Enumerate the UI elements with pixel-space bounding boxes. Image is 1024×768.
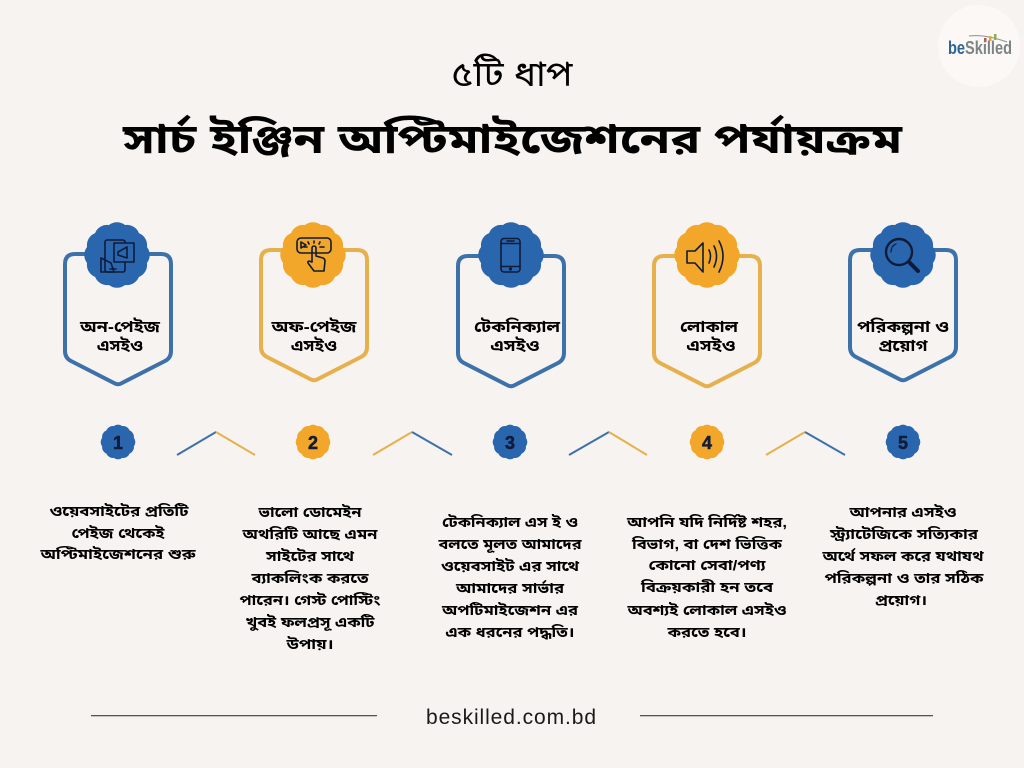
panel: local SEO: [654, 222, 760, 386]
text block: step 3: টেকনিক্যাল এস ই ও: [442, 514, 578, 530]
label: অফ-পেইজ: [270, 318, 357, 336]
arrow chevron 1: [177, 432, 255, 455]
text block: step 3: বলতে মূলত আমাদের: [437, 536, 582, 553]
text block: step 5: আপনার এসইও: [848, 504, 957, 520]
text block: step 2: ভালো ডোমেইন: [257, 504, 362, 520]
text block: step 2: পারেন। গেস্ট পোস্টিং: [240, 592, 381, 608]
panel: on-page SEO: [65, 222, 171, 384]
label: টেকনিক্যাল: [474, 318, 561, 336]
title: সার্চ ইঞ্জিন অপ্টিমাইজেশনের পর্যায়ক্রম: [122, 115, 903, 162]
text block: step 5: অর্থে সফল করে যথাযথ: [821, 547, 984, 564]
icon: speaker: [674, 222, 740, 288]
label: অন-পেইজ: [79, 318, 161, 336]
label: [79, 318, 161, 355]
text block: step 1: অপ্টিমাইজেশনের শুরু: [39, 546, 197, 562]
step number 2: [296, 425, 330, 459]
text block: step 1: পেইজ থেকেই: [72, 525, 165, 541]
step number 5: 5: [898, 433, 908, 453]
step number 1: 1: [113, 433, 123, 453]
label: এসইও: [490, 337, 540, 355]
logo: beSkilled: [948, 38, 1012, 58]
text block: step 4: আপনি যদি নির্দিষ্ট শহর,: [626, 513, 787, 530]
panel: planning and application: [850, 222, 956, 380]
text block: step 1: ওয়েবসাইটের প্রতিটি: [50, 503, 189, 519]
step number 4: 4: [702, 433, 712, 453]
text block: step 1: [39, 503, 197, 562]
footer website: beskilled.com.bd: [426, 706, 596, 729]
step number 1: [101, 425, 135, 459]
text block: step 5: স্ট্র্যাটেজিকে সত্যিকার: [829, 526, 979, 542]
step number 2: 2: [308, 433, 318, 453]
logo: [938, 5, 1020, 87]
text block: step 2: সাইটের সাথে: [265, 548, 354, 564]
label: [474, 318, 561, 355]
text block: step 5: প্রয়োগ।: [875, 592, 927, 608]
arrow chevron 4: [766, 432, 845, 455]
text block: step 4: বিক্রয়কারী হন তবে: [640, 579, 774, 595]
text block: step 3: অপটিমাইজেশন এর: [441, 602, 579, 618]
step number 3: 3: [505, 433, 515, 453]
text block: step 2: খুবই ফলপ্রসূ একটি: [246, 614, 375, 631]
label: এসইও: [686, 337, 736, 355]
step number 4: [690, 425, 724, 459]
text block: step 2: ব্যাকলিংক করতে: [250, 570, 369, 586]
footer rule left: [91, 715, 377, 716]
text block: step 5: পরিকল্পনা ও তার সঠিক: [824, 570, 984, 586]
text block: step 3: আমাদের সার্ভার: [455, 579, 565, 596]
footer rule right: [640, 715, 933, 716]
text block: step 4: বিভাগ, বা দেশ ভিত্তিক: [631, 536, 783, 552]
text block: step 4: কোনো সেবা/পণ্য: [648, 557, 767, 573]
label: এসইও: [291, 337, 337, 355]
text block: step 4: অবশ্যই লোকাল এসইও: [626, 602, 787, 618]
icon: magnifier: [870, 222, 936, 288]
text block: step 2: অথরিটি আছে এমন: [241, 526, 378, 542]
text block: step 3: এক ধরনের পদ্ধতি।: [446, 624, 574, 640]
step number 5: [886, 425, 920, 459]
text block: step 3: [437, 514, 582, 640]
label: লোকাল: [680, 319, 739, 336]
text block: step 4: [626, 513, 787, 640]
label: প্রয়োগ: [878, 338, 929, 355]
icon: click: [280, 222, 346, 288]
label: [270, 318, 357, 355]
text block: step 2: [240, 504, 381, 652]
icon: phone megaphone: [84, 222, 150, 288]
label: পরিকল্পনা ও: [857, 318, 949, 337]
arrow chevron 3: [569, 432, 647, 455]
text block: step 5: [821, 504, 984, 608]
panel: technical SEO: [458, 222, 564, 386]
text block: step 4: করতে হবে।: [666, 624, 746, 640]
icon: smartphone: [478, 222, 544, 288]
step number 3: [493, 425, 527, 459]
panel: off-page SEO: [261, 222, 367, 380]
label: এসইও: [97, 337, 143, 355]
text block: step 3: ওয়েবসাইট এর সাথে: [441, 558, 579, 574]
label: [857, 318, 949, 355]
subtitle: ৫টি ধাপ: [452, 54, 573, 94]
text block: step 2: উপায়।: [285, 636, 334, 652]
arrow chevron 2: [373, 432, 452, 455]
label: [680, 319, 739, 355]
